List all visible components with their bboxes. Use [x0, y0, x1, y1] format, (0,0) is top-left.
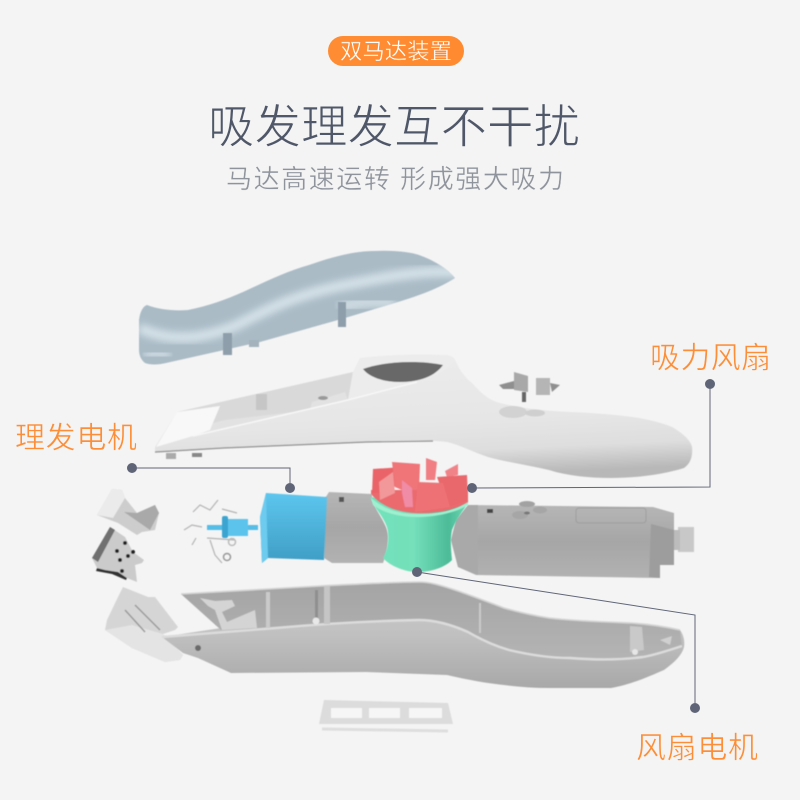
- middle housing shell: [155, 355, 692, 478]
- intake funnel: [348, 355, 455, 400]
- open cavity: [177, 372, 353, 436]
- top cover shell: [139, 251, 460, 364]
- teal fan housing: [370, 497, 468, 572]
- cavity floor: [193, 392, 348, 436]
- rear holes: [499, 406, 527, 418]
- underside line: [155, 441, 433, 452]
- label: 吸力风扇: 吸力风扇: [650, 342, 771, 375]
- leader: fan motor: [412, 567, 700, 713]
- white end plate: [156, 406, 220, 447]
- cavity post: [256, 394, 267, 410]
- leader: hair motor: [127, 463, 295, 493]
- latch detail: [200, 598, 257, 630]
- internal walls: [266, 592, 270, 628]
- comb blade: [92, 527, 144, 582]
- subtitle: 马达高速运转 形成强大吸力: [226, 164, 564, 194]
- screw hole: [195, 645, 201, 651]
- left motor body: [324, 492, 388, 563]
- lower housing shell: [162, 582, 684, 688]
- rim highlight: [193, 382, 417, 436]
- clipper head upper piece: [97, 489, 159, 535]
- title: 吸发理发互不干扰: [208, 101, 580, 153]
- badge: 双马达装置: 双马达装置: [340, 39, 452, 64]
- leader: suction fan: [467, 379, 715, 493]
- filter grille: [319, 700, 453, 731]
- top rim: [181, 582, 680, 630]
- badge: 双马达装置: [328, 36, 464, 66]
- clipper blade guard: [105, 587, 183, 662]
- blue shaft and springs: [184, 500, 258, 563]
- label: 风扇电机: 风扇电机: [636, 732, 758, 765]
- front rim: [162, 620, 682, 659]
- intake hole: [363, 362, 443, 382]
- cavity hole: [318, 396, 328, 400]
- label: 理发电机: 理发电机: [15, 422, 137, 455]
- interior: [181, 582, 682, 659]
- right motor body: [451, 501, 694, 578]
- feet: [166, 453, 176, 459]
- red fan impeller: [371, 458, 468, 513]
- blue motor: [260, 493, 327, 563]
- small switch part: [499, 372, 560, 402]
